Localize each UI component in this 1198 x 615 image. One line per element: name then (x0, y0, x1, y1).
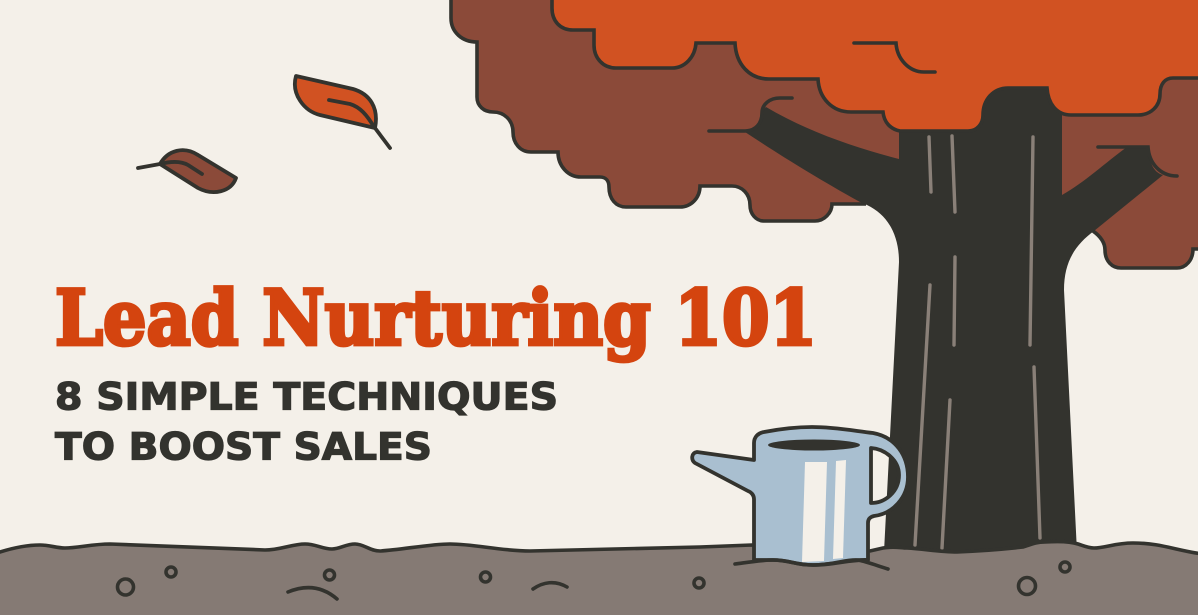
orange front canopy (552, 0, 1198, 131)
soil pebbles (118, 562, 1070, 599)
watering can (692, 427, 908, 569)
subtitle: TO BOOST SALES (55, 426, 432, 468)
subtitle (55, 376, 558, 468)
can opening (768, 440, 860, 450)
tree (451, 0, 1198, 552)
leaf: orange (295, 76, 390, 148)
subtitle: 8 SIMPLE TECHNIQUES (55, 376, 558, 418)
soil line at can base (735, 560, 888, 569)
title: Lead Nurturing 101 (55, 274, 817, 362)
bark lines (915, 136, 1040, 548)
canopy detail line (854, 43, 935, 72)
ground (0, 542, 1198, 615)
trunk and branches (709, 80, 1177, 552)
brown back canopy (451, 0, 1198, 268)
can highlights (802, 460, 846, 562)
leaf: brown (138, 150, 236, 192)
